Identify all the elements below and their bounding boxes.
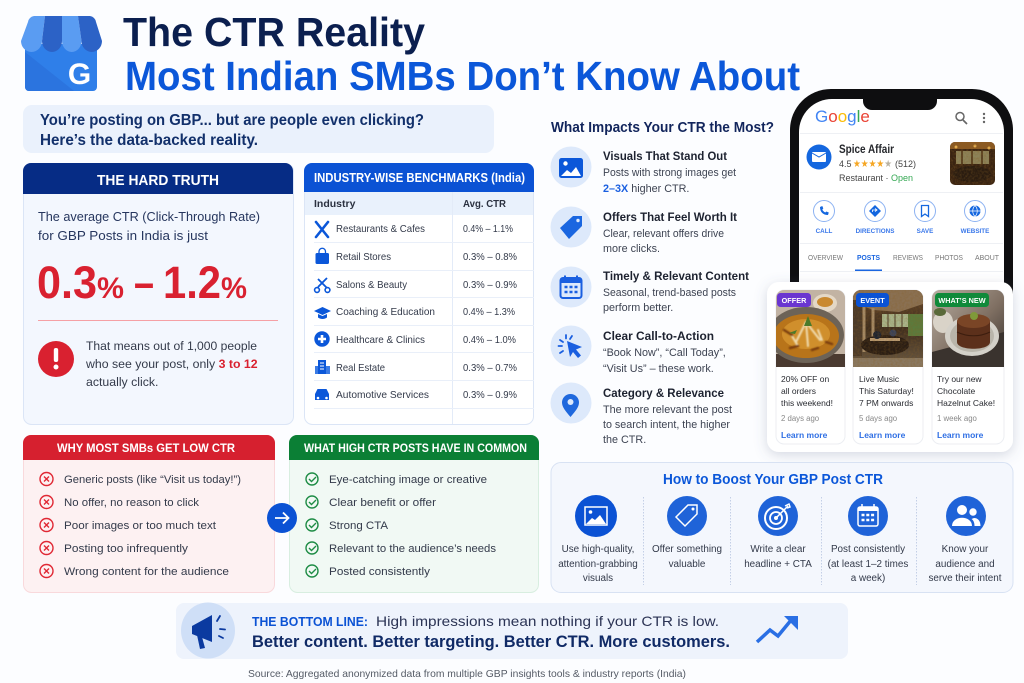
row: healthcare and clinics: Healthcare & Clinics: [336, 334, 425, 346]
tip: post consistently: Post consistently: [831, 544, 905, 555]
text: out of 1000 people: who see your post, only 3 to 12: [85, 357, 258, 371]
row: healthcare and clinics: 0.4% – 1.0%: [463, 334, 516, 346]
list: high CTR traits: [306, 473, 496, 578]
badge: event: [856, 293, 889, 307]
intro banner: [23, 105, 494, 153]
row: coaching and education: Coaching & Education: [336, 306, 435, 318]
heading: high CTR: WHAT HIGH CTR POSTS HAVE IN COMMON: [304, 443, 527, 455]
big number: CTR range: 1.2: [163, 257, 221, 308]
item: clear call to action: “Book Now”, “Call Today”,: [603, 347, 726, 359]
heading: benchmarks: [304, 163, 534, 192]
item: offers that feel worth it: Clear, relevant offers drive: [603, 228, 724, 240]
list: high CTR traits: Posted consistently: [329, 566, 430, 578]
item: visuals that stand out: Visuals That Stand Out: [603, 151, 727, 163]
item: visuals that stand out: 2–3X higher CTR.: [603, 183, 689, 195]
tip: clear headline and CTA: Write a clear: [750, 544, 806, 555]
tip: know your audience: audience and: [935, 559, 995, 570]
item: category and relevance: the CTR.: [603, 434, 646, 446]
tip: high quality visuals: visuals: [583, 573, 613, 584]
item: timely and relevant content: [550, 266, 749, 314]
photo: biryani bowl: [776, 290, 845, 367]
text: out of 1000 people: That means out of 1,000 people: [86, 339, 257, 353]
badge: event: EVENT: [860, 296, 885, 305]
post text: offer: this weekend!: [781, 398, 833, 408]
post text: what's new: Try our new: [937, 374, 982, 384]
item: category and relevance: to search intent, the higher: [603, 419, 730, 431]
item: timely and relevant content: perform better.: [603, 302, 673, 314]
post text: what's new: 1 week ago: [937, 414, 978, 423]
action buttons: SAVE: [917, 228, 933, 235]
row: automotive services: 0.3% – 0.9%: [463, 389, 517, 401]
post text: offer: 2 days ago: [781, 414, 820, 423]
phone mockup: [790, 89, 1013, 296]
badge: what's new: WHAT’S NEW: [938, 296, 986, 305]
post text: event: Live Music: [859, 374, 900, 384]
item: category and relevance: The more relevant the post: [603, 404, 732, 416]
business info: Spice Affair: (512): [895, 159, 916, 169]
row: restaurants and cafes: [316, 222, 513, 237]
title: The CTR Reality: [123, 9, 425, 55]
table header: Industry: [314, 198, 356, 210]
text: out of 1000 people: actually click.: [86, 375, 158, 389]
list: high CTR traits: Strong CTA: [329, 520, 388, 532]
post text: event: [859, 374, 914, 440]
tabs: [808, 253, 1000, 271]
row: automotive services: Automotive Services: [336, 389, 429, 401]
panel: how to boost GBP post CTR: [551, 462, 1013, 592]
heading: low CTR: [23, 435, 275, 460]
post text: offer: all orders: [781, 386, 816, 396]
heading: benchmarks: INDUSTRY-WISE BENCHMARKS (India): [314, 171, 525, 185]
icon: Google Business Profile store logo: [21, 16, 102, 91]
badge: what's new: [935, 293, 989, 307]
business info: Spice Affair: Spice Affair: [839, 144, 894, 156]
item: category and relevance: Category & Relevance: [603, 388, 724, 400]
text: bottom line message: High impressions mean nothing if your CTR is low.: [376, 613, 719, 629]
row: restaurants and cafes: Restaurants & Cafes: [336, 223, 425, 235]
tip: high quality visuals: Use high-quality,: [562, 544, 634, 555]
post text: event: 7 PM onwards: [859, 398, 913, 408]
panel: industry benchmarks table: [304, 163, 534, 424]
row: salons and beauty: [315, 278, 517, 292]
tip: clear headline and CTA: headline + CTA: [744, 559, 812, 570]
heading: low CTR: WHY MOST SMBs GET LOW CTR: [57, 443, 236, 455]
list: low CTR reasons: Generic posts (like “Visit us today!”): [64, 474, 241, 486]
panel: what high CTR posts have in common: [289, 435, 539, 592]
heading: the hard truth: [23, 163, 293, 194]
item: offers that feel worth it: Offers That Feel Worth It: [603, 212, 737, 224]
list: low CTR reasons: Poor images or too much text: [64, 520, 217, 532]
badge: offer: [777, 293, 811, 307]
post card: what's new: [932, 290, 1004, 444]
action buttons: DIRECTIONS: [856, 228, 894, 235]
business info: Spice Affair: [806, 144, 916, 183]
panel: the hard truth: [23, 163, 294, 424]
panel: GBP post cards: [767, 282, 1013, 452]
tabs: REVIEWS: [893, 253, 923, 262]
notch: [863, 97, 937, 110]
row: retail stores: 0.3% – 0.8%: [463, 251, 517, 263]
row: real estate: [315, 360, 517, 374]
item: clear call to action: Clear Call-to-Action: [603, 331, 714, 343]
row: salons and beauty: Salons & Beauty: [336, 279, 408, 291]
photo: restaurant interior: [853, 290, 923, 367]
post card: offer: [768, 290, 845, 444]
row: automotive services: [315, 389, 517, 401]
tip: offer something valuable: [652, 496, 722, 570]
heading: high CTR: [289, 435, 539, 460]
tabs: OVERVIEW: [808, 253, 843, 262]
intro banner: You’re posting on GBP... but are people even clicking?: [40, 112, 424, 129]
business info: Spice Affair: Restaurant · Open: [839, 173, 913, 183]
panel: why most SMBs get low CTR: [23, 435, 275, 592]
post text: what's new: Chocolate: [937, 386, 976, 396]
post text: event: Learn more: [859, 430, 906, 440]
tip: clear headline and CTA: [744, 496, 812, 570]
item: timely and relevant content: Timely & Relevant Content: [603, 271, 749, 283]
row: real estate: Real Estate: [336, 362, 385, 374]
big number: CTR range: –: [134, 257, 154, 308]
big number: CTR range: %: [221, 272, 247, 305]
icons: search and menu: [956, 112, 985, 124]
row: salons and beauty: 0.3% – 0.9%: [463, 279, 517, 291]
post card: event: [853, 290, 923, 444]
tip: know your audience: Know your: [942, 544, 989, 555]
tip: offer something valuable: valuable: [669, 559, 706, 570]
heading: what impacts CTR: What Impacts Your CTR the Most?: [551, 120, 774, 136]
item: visuals that stand out: [550, 146, 736, 195]
tabs: PHOTOS: [935, 253, 963, 262]
action buttons: CALL: [816, 228, 833, 235]
list: low CTR reasons: Posting too infrequently: [64, 543, 188, 555]
item: offers that feel worth it: [550, 206, 737, 255]
tabs: POSTS: [857, 253, 880, 262]
item: clear call to action: [550, 326, 726, 375]
item: timely and relevant content: Seasonal, trend-based posts: [603, 287, 737, 299]
tip: high quality visuals: [558, 495, 638, 584]
big number: CTR range: [37, 257, 247, 308]
post text: event: 5 days ago: [859, 414, 898, 423]
item: offers that feel worth it: more clicks.: [603, 243, 660, 255]
text: average CTR intro: for GBP Posts in India is just: [38, 228, 208, 243]
tip: know your audience: [928, 496, 1002, 584]
photo: chocolate cake: [932, 290, 1004, 367]
icon: trend arrow: [757, 616, 798, 642]
tip: post consistently: a week): [851, 573, 885, 584]
post text: event: This Saturday!: [859, 386, 914, 396]
text: bottom line message: [252, 613, 730, 651]
post text: what's new: Learn more: [937, 430, 984, 440]
source note: Source: Aggregated anonymized data from multiple GBP insights tools & industry reports (India): [248, 669, 686, 680]
icon: megaphone: [181, 602, 235, 658]
post text: offer: [781, 374, 833, 440]
post text: offer: 20% OFF on: [781, 374, 829, 384]
row: real estate: 0.3% – 0.7%: [463, 362, 517, 374]
post text: what's new: [937, 374, 995, 440]
post text: what's new: Hazelnut Cake!: [937, 398, 995, 408]
photo: restaurant thumbnail: [950, 142, 995, 185]
google wordmark: Google: [815, 107, 870, 126]
panel: the bottom line: [176, 602, 848, 659]
list: high CTR traits: Clear benefit or offer: [329, 497, 436, 509]
big number: CTR range: %: [97, 272, 124, 305]
list: low CTR reasons: [40, 472, 241, 578]
big number: CTR range: 0.3: [37, 257, 97, 308]
tabs: ABOUT: [975, 253, 1000, 262]
intro banner: Here’s the data-backed reality.: [40, 132, 258, 149]
action buttons: [814, 200, 989, 235]
action buttons: WEBSITE: [961, 228, 989, 235]
tip: know your audience: serve their intent: [928, 573, 1002, 584]
row: retail stores: Retail Stores: [336, 251, 391, 263]
icon: exclamation alert: [38, 341, 74, 377]
row: coaching and education: 0.4% – 1.3%: [463, 306, 515, 318]
table header: Avg. CTR: [463, 198, 506, 210]
row: healthcare and clinics: [314, 331, 516, 347]
row: coaching and education: [314, 306, 515, 319]
text: average CTR intro: The average CTR (Click-Through Rate): [38, 209, 260, 224]
list: low CTR reasons: Wrong content for the audience: [64, 566, 229, 578]
text: average CTR intro: [38, 209, 260, 243]
badge: offer: OFFER: [782, 296, 807, 305]
title: Most Indian SMBs Don’t Know About: [125, 53, 800, 99]
arrow: low to high CTR: [267, 503, 297, 533]
business info: Spice Affair: ★★★★★: [853, 159, 892, 170]
tip: high quality visuals: attention-grabbing: [558, 559, 638, 570]
tip: offer something valuable: Offer something: [652, 544, 722, 555]
text: out of 1000 people: [85, 339, 258, 389]
icon: Google Business Profile store logo: G: [68, 58, 91, 91]
title: [123, 9, 800, 99]
heading: how to boost: How to Boost Your GBP Post CTR: [663, 472, 883, 488]
heading: the hard truth: THE HARD TRUTH: [97, 173, 219, 189]
text: bottom line message: THE BOTTOM LINE:: [252, 614, 368, 629]
tip: post consistently: (at least 1–2 times: [828, 559, 908, 570]
tip: post consistently: [828, 496, 908, 584]
list: low CTR reasons: No offer, no reason to click: [64, 497, 199, 509]
item: category and relevance: [550, 382, 732, 446]
text: bottom line message: Better content. Better targeting. Better CTR. More customers.: [252, 633, 730, 651]
row: restaurants and cafes: 0.4% – 1.1%: [463, 223, 513, 235]
list: high CTR traits: Relevant to the audience’s needs: [329, 543, 496, 555]
business info: Spice Affair: 4.5: [839, 159, 852, 169]
list: high CTR traits: Eye-catching image or creative: [329, 474, 487, 486]
item: clear call to action: “Visit Us” – these work.: [603, 363, 714, 375]
post text: offer: Learn more: [781, 430, 828, 440]
table header: [305, 192, 533, 215]
item: visuals that stand out: Posts with strong images get: [603, 167, 736, 179]
row: retail stores: [316, 248, 517, 264]
